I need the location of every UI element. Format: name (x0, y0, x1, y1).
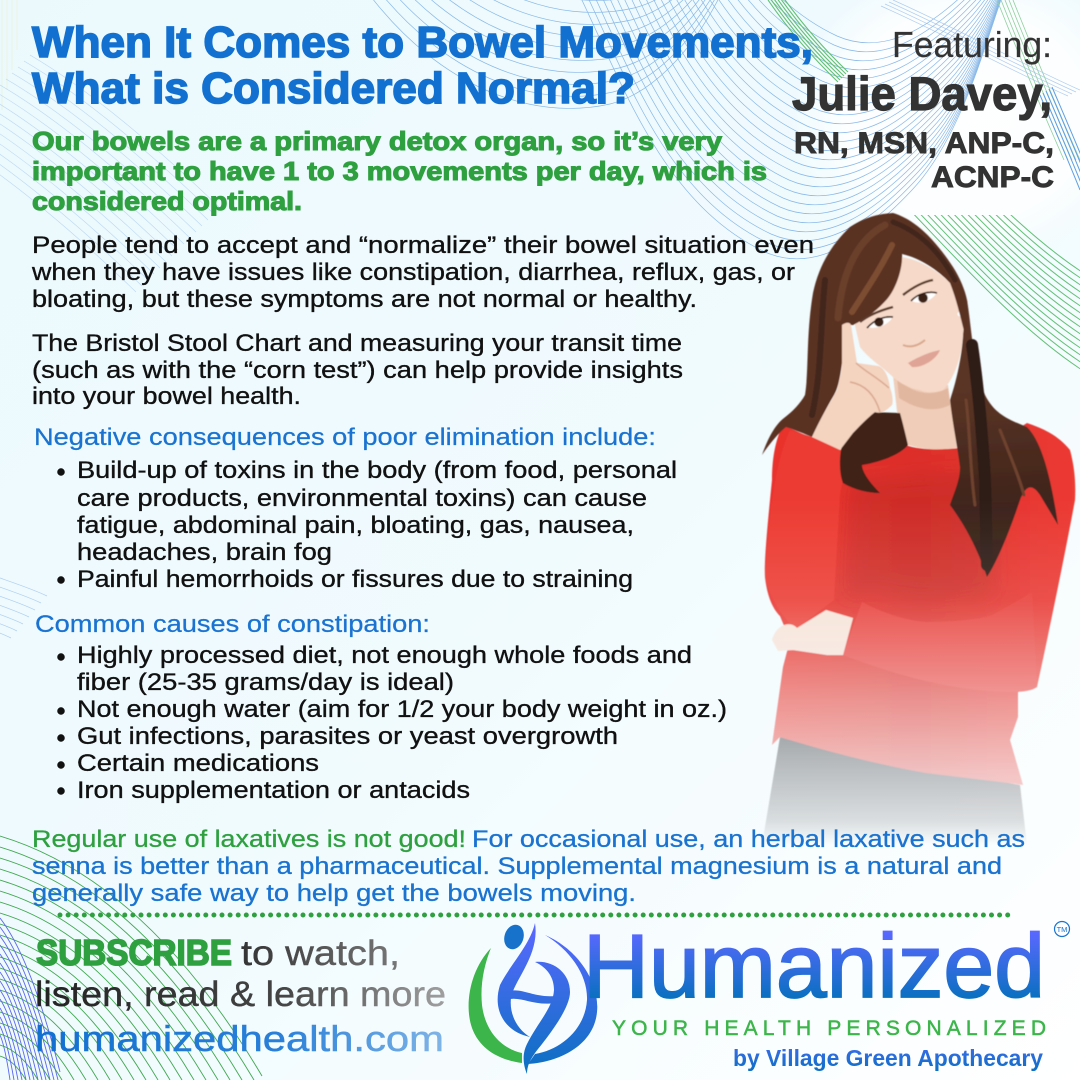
facial features (860, 280, 940, 367)
earring (957, 312, 961, 317)
laxatives note: Regular use of laxatives is not good! (32, 826, 466, 853)
title (32, 18, 813, 113)
pants (762, 737, 1027, 845)
raised hand (812, 323, 893, 450)
subscribe call to action: humanizedhealth.com (35, 1018, 444, 1059)
list: negative consequences: Painful hemorrhoids or fissures due to straining (77, 566, 633, 593)
list: common causes: fiber (25-35 grams/day is ideal) (77, 669, 454, 696)
sweater (765, 423, 1075, 785)
laxatives note (32, 826, 1025, 907)
list: common causes: Iron supplementation or antacids (77, 777, 470, 804)
subscribe call to action (35, 932, 446, 1059)
paragraph: normalizing symptoms: when they have issues like constipation, diarrhea, reflux, gas, or (31, 259, 795, 286)
paragraph: normalizing symptoms: People tend to accept and “normalize” their bowel situation even (32, 232, 814, 259)
neck shadow (897, 378, 950, 409)
logo byline: by Village Green Apothecary (733, 1045, 1043, 1071)
list: negative consequences: Build-up of toxins in the body (from food, personal (77, 457, 677, 484)
paragraph: normalizing symptoms: bloating, but these symptoms are not normal or healthy. (32, 286, 697, 313)
list: negative consequences: fatigue, abdominal pain, bloating, gas, nausea, (77, 512, 634, 539)
paragraph: Bristol Stool Chart: The Bristol Stool Chart and measuring your transit time (32, 330, 682, 357)
logo emblem (469, 922, 597, 1074)
list: common causes: Highly processed diet, not enough whole foods and (77, 642, 692, 669)
face (853, 257, 963, 392)
woman photo illustration (762, 213, 1075, 845)
Humanized logo (469, 917, 1070, 1074)
neck (893, 375, 957, 449)
laxatives note: For occasional use, an herbal laxative such as (472, 826, 1025, 853)
list: negative consequences (57, 457, 677, 593)
featuring credit (792, 24, 1054, 194)
subscribe call to action: SUBSCRIBE (36, 932, 232, 973)
paragraph: Bristol Stool Chart: (such as with the “corn test”) can help provide insights (32, 357, 683, 384)
left hair strand under hand (840, 412, 908, 493)
green intro text: considered optimal. (32, 186, 302, 216)
hair cap and left side (762, 213, 968, 455)
logo tagline: YOUR HEALTH PERSONALIZED (612, 1017, 1046, 1040)
torso shading (845, 470, 995, 600)
laxatives note: generally safe way to help get the bowels moving. (32, 880, 636, 907)
title: What is Considered Normal? (32, 64, 635, 113)
green intro text: important to have 1 to 3 movements per day, which is (32, 156, 767, 186)
list: common causes (57, 642, 727, 804)
lower hand (772, 610, 853, 655)
right hair mass (950, 300, 1058, 577)
featuring credit: Julie Davey, (792, 67, 1052, 120)
folded forearm (843, 592, 1037, 692)
list: negative consequences: headaches, brain fog (77, 539, 332, 566)
featuring credit: Featuring: (892, 24, 1052, 65)
title: When It Comes to Bowel Movements, (32, 18, 813, 67)
list: negative consequences: care products, environmental toxins) can cause (77, 485, 647, 512)
heading: negative consequences: Negative consequences of poor elimination include: (34, 424, 656, 451)
list: common causes: Gut infections, parasites or yeast overgrowth (77, 723, 618, 750)
list: common causes: Not enough water (aim for 1/2 your body weight in oz.) (77, 696, 727, 723)
subscribe call to action: to watch, (241, 934, 400, 973)
subscribe call to action: listen, read & learn more (35, 975, 446, 1014)
paragraph: normalizing symptoms (31, 232, 814, 313)
featuring credit: RN, MSN, ANP-C, (794, 127, 1054, 160)
logo wordmark: Humanized (583, 917, 1045, 1017)
list: common causes: Certain medications (77, 750, 319, 777)
hair highlights (812, 222, 1024, 565)
raised arm sleeve (766, 431, 842, 590)
laxatives note: senna is better than a pharmaceutical. Supplemental magnesium is a natural and (32, 853, 1002, 880)
green intro text: Our bowels are a primary detox organ, so it’s very (32, 126, 723, 156)
featuring credit: ACNP-C (931, 161, 1054, 194)
dotted divider (60, 912, 1012, 918)
paragraph: Bristol Stool Chart (32, 330, 683, 410)
heading: common causes: Common causes of constipation: (35, 611, 430, 638)
trademark: TM (1057, 925, 1067, 934)
paragraph: Bristol Stool Chart: into your bowel health. (32, 383, 301, 410)
green intro text (32, 126, 767, 216)
finger creases (850, 363, 889, 412)
trademark (1054, 922, 1070, 936)
